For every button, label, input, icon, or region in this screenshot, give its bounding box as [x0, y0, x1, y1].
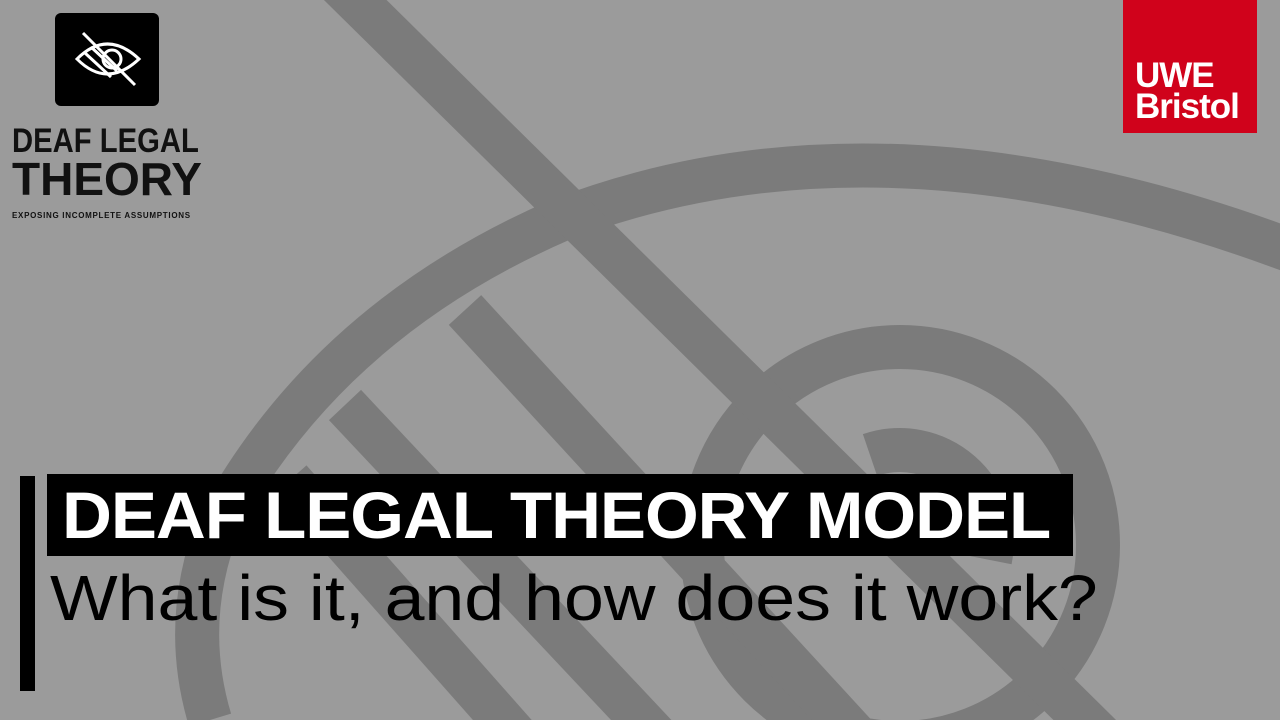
- logo text: [12, 122, 202, 205]
- logo text: DEAF LEGAL: [12, 122, 199, 160]
- logo: UWE Bristol: Bristol: [1135, 87, 1239, 126]
- title: DEAF LEGAL THEORY MODEL: [62, 478, 1050, 552]
- logo: UWE Bristol: [1123, 0, 1257, 133]
- logo: UWE Bristol: UWE: [1135, 56, 1214, 95]
- accent bar: [20, 476, 35, 691]
- tagline: EXPOSING INCOMPLETE ASSUMPTIONS: [12, 211, 191, 220]
- subtitle: What is it, and how does it work?: [50, 562, 1098, 634]
- icon: crossed eye: [55, 13, 159, 106]
- logo text: THEORY: [12, 153, 202, 205]
- logo: Deaf Legal Theory: [12, 13, 202, 220]
